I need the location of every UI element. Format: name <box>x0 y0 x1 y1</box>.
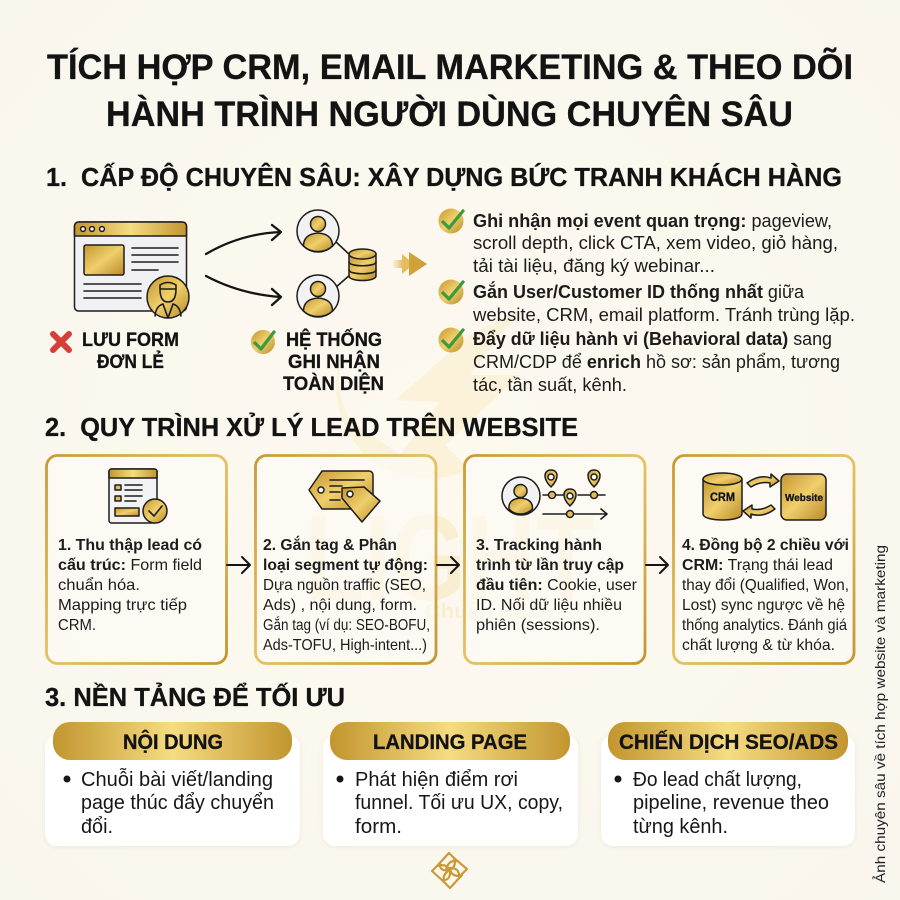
text: step 2: 2. Gắn tag & Phân <box>263 535 397 554</box>
text: step 1: cấu trúc: Form field <box>58 557 202 574</box>
checklist item: behavioral data: CRM/CDP để enrich hồ sơ: sản phẩm, tương <box>473 352 840 372</box>
panel: content <box>45 722 300 846</box>
watermark logo: Chuẩn SEO <box>425 601 545 623</box>
title <box>47 47 853 134</box>
panel: content: NỘI DUNG <box>123 730 223 754</box>
arrows: form to system <box>206 225 281 305</box>
label: single form: ĐƠN LẺ <box>97 351 164 373</box>
panel: content: page thúc đẩy chuyển <box>81 791 274 814</box>
checklist item: behavioral data: tác, tần suất, kênh. <box>473 375 627 395</box>
text: step 1: 1. Thu thập lead có <box>58 537 202 554</box>
text: step 3 <box>476 537 638 634</box>
icon: CRM website sync: Website <box>785 492 823 504</box>
checklist item: events: tải tài liệu, đăng ký webinar... <box>473 256 715 276</box>
panel: seo ads campaign: Đo lead chất lượng, <box>633 768 802 791</box>
checklist item: events <box>438 208 838 276</box>
heading: section 2: 2. QUY TRÌNH XỬ LÝ LEAD TRÊN WEBSITE <box>45 411 578 442</box>
checklist item: behavioral data <box>438 328 840 395</box>
arrow: step 1 to 2 <box>227 557 250 573</box>
text: step 4: chất lượng & từ khóa. <box>682 637 835 654</box>
arrow: step 3 to 4 <box>646 557 668 573</box>
icon: tags <box>309 471 380 522</box>
watermark logo: LIGHT <box>305 490 595 626</box>
text: step 2: Ads-TOFU, High-intent...) <box>263 637 427 654</box>
label: single form <box>53 330 179 373</box>
label: complete system: GHI NHẬN <box>288 351 380 373</box>
panel: step 4 <box>674 456 854 664</box>
panel: landing page: funnel. Tối ưu UX, copy, <box>355 791 563 814</box>
title: TÍCH HỢP CRM, EMAIL MARKETING & THEO DÕI <box>47 47 853 87</box>
checklist item: user id: Gắn User/Customer ID thống nhất giữa <box>473 281 805 302</box>
icon: double arrow <box>392 252 427 276</box>
panel: landing page <box>323 722 578 846</box>
text: step 3: ID. Nối dữ liệu nhiều <box>476 597 622 614</box>
text: step 2: Ads) , nội dung, form. <box>263 597 417 614</box>
panel: seo ads campaign: CHIẾN DỊCH SEO/ADS <box>619 731 838 754</box>
heading: section 1: 1. CẤP ĐỘ CHUYÊN SÂU: XÂY DỰNG BỨC TRANH KHÁCH HÀNG <box>46 162 842 192</box>
text: step 4: thống analytics. Đánh giá <box>682 617 847 634</box>
panel: landing page: Phát hiện điểm rơi <box>355 768 518 791</box>
icon: footer logo <box>432 853 467 888</box>
heading: section 3: 3. NỀN TẢNG ĐỂ TỐI ƯU <box>45 682 345 712</box>
panel: seo ads campaign: từng kênh. <box>633 815 728 838</box>
icon: form check <box>109 469 167 523</box>
icon: users and database <box>297 210 376 317</box>
panel: step 3 <box>464 456 645 664</box>
text: step 1: chuẩn hóa. <box>58 576 140 594</box>
panel: content: đổi. <box>81 815 113 838</box>
text: step 3: đầu tiên: Cookie, user <box>476 577 638 594</box>
text: step 2: loại segment tự động: <box>263 557 428 574</box>
text: step 1: CRM. <box>58 617 96 634</box>
icon: CRM website sync: CRM <box>710 492 735 504</box>
text: step 4: 4. Đồng bộ 2 chiều với <box>682 537 849 554</box>
checklist item: events: Ghi nhận mọi event quan trọng: pageview, <box>473 211 832 231</box>
panel: step 2 <box>256 456 436 664</box>
panel: seo ads campaign: pipeline, revenue theo <box>633 791 829 814</box>
text: step 4: thay đổi (Qualified, Won, <box>682 576 849 594</box>
panel: landing page: form. <box>355 815 402 838</box>
panel: step 1 <box>46 456 226 664</box>
text: step 3: 3. Tracking hành <box>476 537 602 554</box>
text: step 3: phiên (sessions). <box>476 617 600 634</box>
checklist item: behavioral data: Đẩy dữ liệu hành vi (Behavioral data) sang <box>473 329 832 349</box>
text: step 1 <box>58 537 202 634</box>
panel: content: Chuỗi bài viết/landing <box>81 768 273 791</box>
panel: seo ads campaign <box>601 722 855 846</box>
text: step 3: trình từ lần truy cập <box>476 557 624 574</box>
label: complete system: HỆ THỐNG <box>286 329 382 351</box>
label: single form: LƯU FORM <box>82 330 179 351</box>
text: step 2: Gắn tag (ví dụ: SEO-BOFU, <box>263 615 430 634</box>
panel: landing page: LANDING PAGE <box>373 731 527 754</box>
label: complete system <box>251 329 384 395</box>
checklist item: events: scroll depth, click CTA, xem video, giỏ hàng, <box>473 233 838 253</box>
arrow: step 2 to 3 <box>437 557 459 573</box>
checklist item: user id <box>438 280 855 325</box>
text: step 4: Lost) sync ngược về hệ <box>682 597 845 614</box>
label: complete system: TOÀN DIỆN <box>283 373 384 395</box>
text: step 2: Dựa nguồn traffic (SEO, <box>263 577 426 594</box>
text: step 2 <box>263 535 430 654</box>
text: step 4 <box>682 537 849 654</box>
text: step 4: CRM: Trạng thái lead <box>682 557 833 574</box>
side caption: Ảnh chuyên sâu về tích hợp website và marketing <box>873 545 888 883</box>
watermark logo <box>305 310 595 626</box>
icon: CRM website sync <box>703 473 826 520</box>
text: step 1: Mapping trực tiếp <box>58 597 187 614</box>
checklist item: user id: website, CRM, email platform. Tránh trùng lặp. <box>472 305 855 325</box>
icon: journey tracking <box>502 470 607 519</box>
icon: browser form with user <box>74 222 189 318</box>
title: HÀNH TRÌNH NGƯỜI DÙNG CHUYÊN SÂU <box>106 94 793 134</box>
